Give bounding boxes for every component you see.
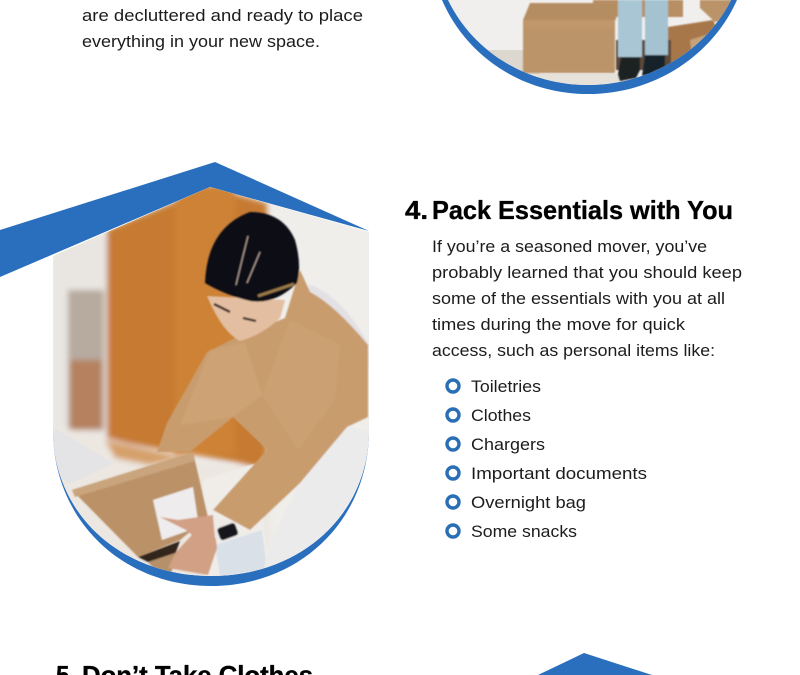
face [207, 296, 285, 341]
bullet list: essentials: Chargers [471, 435, 545, 454]
text block: end of step 3: are decluttered and ready to place [82, 6, 363, 25]
heading: step 4: 4. [405, 195, 428, 225]
strap [308, 286, 368, 370]
bullet list: essentials: Overnight bag [471, 493, 586, 512]
bullet list: essentials [447, 377, 647, 541]
blanket [53, 430, 60, 476]
hand [160, 515, 217, 575]
text block: step 4 intro: times during the move for quick [432, 315, 686, 334]
text block: step 4 intro: If you’re a seasoned mover, you’ve [432, 237, 707, 256]
text block: step 4 intro [432, 237, 742, 360]
text block: end of step 3: everything in your new space. [82, 32, 320, 51]
bullet list: essentials: Clothes [471, 406, 531, 425]
sweater [157, 270, 368, 530]
heading: step 4: Pack Essentials with You [432, 195, 733, 225]
text block: step 4 intro: some of the essentials with you at all [432, 289, 725, 308]
image: top of next shield frame [538, 653, 652, 675]
bullet list: essentials: Important documents [471, 464, 647, 483]
image: moving boxes in circular frame [440, 0, 740, 94]
box [78, 460, 208, 558]
blue roof banner and frame [0, 162, 369, 277]
cuff and watch [212, 517, 216, 538]
bullet list: essentials: Toiletries [471, 377, 541, 396]
blue frame arc [442, 0, 737, 94]
photo: boxes and legs [448, 0, 731, 85]
box label [153, 487, 199, 540]
text block: end of step 3 [82, 6, 363, 51]
text block: step 4 intro: probably learned that you should keep [432, 263, 742, 282]
bullet list: essentials: Some snacks [471, 522, 577, 541]
hair [205, 212, 299, 302]
photo: woman with box [53, 180, 373, 580]
image: woman packing box in shield frame [0, 162, 373, 586]
white surface and pants [202, 463, 263, 576]
text block: step 4 intro: access, such as personal items like: [432, 341, 715, 360]
